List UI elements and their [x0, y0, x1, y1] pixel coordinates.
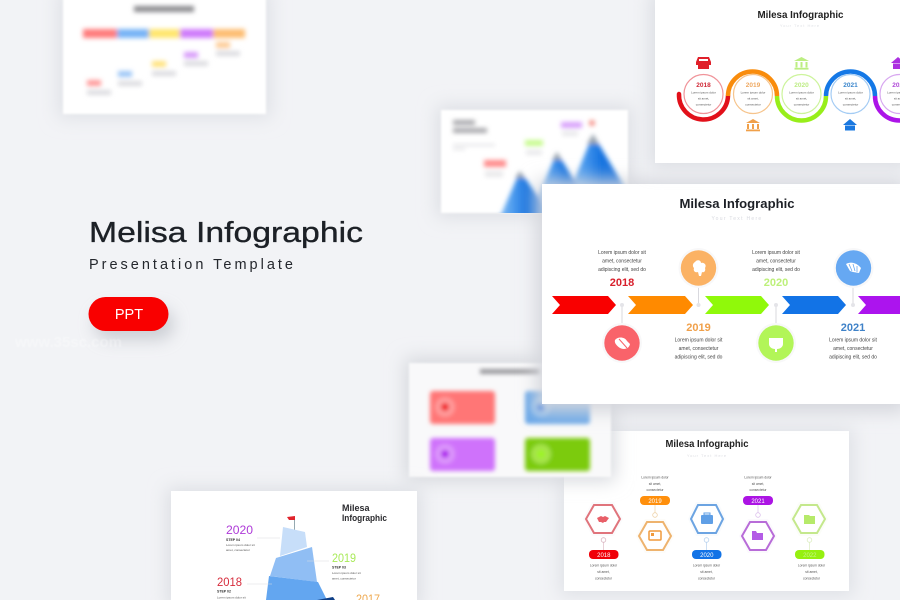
slide: semicircle timeline [650, 0, 900, 168]
label: 2019 [307, 551, 361, 580]
step: 2019: 2019 [686, 322, 711, 334]
label: 2020 [226, 523, 280, 552]
step: 2021: amet, consectetur [833, 346, 873, 352]
year ring: 2018: Lorem ipsum dolor [691, 90, 716, 94]
hexagon step: 2021: Lorem ipsum dolor [744, 476, 773, 480]
hexagon step: 2019: consectetur [646, 488, 664, 492]
icon: green bank [794, 57, 809, 70]
step: 2018: adipiscing elit, sed do [598, 267, 646, 273]
hexagon step: 2022: 2022 [803, 553, 817, 559]
arrow: orange [628, 296, 693, 314]
step: 2021: 2021 [841, 322, 865, 334]
subtitle: Presentation Template: Presentation Template [89, 257, 293, 273]
year ring: 2018 [684, 74, 723, 114]
step: 2020: 2020 [764, 277, 788, 289]
slide: layered mountain [167, 488, 421, 600]
hexagon step: 2019 [636, 476, 674, 553]
heading: main slide title: Milesa Infographic [680, 196, 794, 211]
heading: mountain slide title [342, 503, 387, 523]
label: 2018: Lorem ipsum dolor sit [217, 596, 246, 600]
step: 2021: adipiscing elit, sed do [829, 354, 877, 360]
wave: coloured arcs [679, 72, 900, 120]
heading: mountain slide title: Milesa [342, 503, 371, 513]
label: 2018: 2018 [217, 575, 242, 589]
step: 2019 [675, 248, 723, 360]
label: 2020: 2020 [226, 523, 253, 537]
step: 2018: Lorem ipsum dolor sit [598, 250, 647, 256]
step: 2020: adipiscing elit, sed do [752, 267, 800, 273]
year ring: 2019: sit amet, [747, 96, 759, 100]
step: 2020: amet, consectetur [756, 258, 796, 264]
label: 2020: STEP 04 [226, 538, 240, 542]
year ring: 2018: sit amet, [698, 96, 709, 100]
hexagon step: 2021: sit amet, [752, 482, 764, 486]
label: 2019: STEP 03 [332, 566, 346, 570]
step: 2019: adipiscing elit, sed do [675, 354, 723, 360]
hexagon step: 2018: Lorem ipsum dolor [590, 564, 618, 568]
step: 2020 [752, 250, 801, 363]
icon: blue house [843, 119, 857, 130]
step: 2018: 2018 [610, 277, 634, 289]
heading: hexagon slide title: Milesa Infographic [666, 439, 749, 450]
arrow: purple [858, 296, 900, 314]
icon: store [696, 57, 711, 69]
step: 2018: amet, consectetur [602, 258, 642, 264]
slide: blurred staircase timeline [58, 0, 271, 118]
hexagon step: 2020 [688, 502, 726, 580]
hexagon step: 2020: 2020 [700, 553, 714, 559]
button: PPT: PPT [115, 307, 143, 323]
subtitle: hexagon slide: Your Text Here [687, 453, 727, 458]
hexagon step: 2019: 2019 [648, 499, 662, 505]
year ring: 2021: 2021 [843, 82, 858, 89]
hexagon step: 2022: Lorem ipsum dolor [798, 564, 826, 568]
heading: mountain slide title: Infographic [342, 513, 387, 523]
watermark: www.35sc.com [14, 334, 122, 351]
slide: blurred colour cards [405, 358, 615, 481]
button: PPT [88, 297, 174, 340]
year ring: 2020: 2020 [794, 82, 809, 89]
heading: semicircle slide title: Milesa Infographic [758, 10, 844, 21]
year ring: 2021 [831, 74, 870, 114]
hexagon step: 2022 [790, 502, 828, 580]
step: 2021: Lorem ipsum dolor sit [829, 338, 878, 344]
year ring: 2019: consectetur [745, 102, 761, 106]
step: 2019: amet, consectetur [679, 346, 719, 352]
year ring: 2018: 2018 [696, 82, 711, 89]
hexagon step: 2019: Lorem ipsum dolor [641, 476, 670, 480]
chart: stacked mountain layers [266, 527, 335, 600]
hexagon step: 2021 [739, 476, 777, 553]
hexagon step: 2020: consectetur [698, 576, 716, 580]
icon: purple house [891, 57, 900, 69]
year ring: 2018: consectetur [696, 102, 711, 106]
arrow: red [552, 296, 616, 314]
label: 2019: Lorem ipsum dolor sit [332, 571, 361, 575]
hexagon step: 2021: 2021 [751, 499, 765, 505]
step: 2019: Lorem ipsum dolor sit [675, 338, 723, 344]
title: Melisa Infographic: Melisa Infographic [89, 217, 363, 249]
label: 2019: amet, consectetur [332, 576, 356, 580]
year ring: 2019 [734, 74, 772, 114]
subtitle: main slide: Your Text Here [712, 216, 762, 222]
hexagon step: 2018: consectetur [595, 576, 613, 580]
hexagon step: 2020: sit amet, [700, 570, 713, 574]
year ring: 2020: sit amet, [796, 96, 807, 100]
label: 2018: STEP 02 [217, 590, 231, 594]
hexagon step: 2018: sit amet, [597, 570, 610, 574]
arrow: blue [782, 296, 846, 314]
hexagon step: 2020: Lorem ipsum dolor [693, 564, 721, 568]
year ring: 2020: Lorem ipsum dolor [789, 90, 814, 94]
year ring: 2019: Lorem ipsum dolor [741, 90, 765, 94]
year ring: 2020 [782, 74, 821, 114]
year ring: 2021: sit amet, [845, 96, 856, 100]
year ring: 2020: consectetur [794, 102, 809, 106]
hexagon step: 2019: sit amet, [649, 482, 661, 486]
label: 2020: amet, consectetur [226, 548, 250, 552]
year ring: 2022 [880, 74, 900, 114]
year ring: 2021: consectetur [843, 102, 858, 106]
hexagon step: 2021: consectetur [749, 488, 767, 492]
icon: flag [287, 516, 295, 530]
step: 2021 [829, 248, 878, 360]
year ring: 2021: Lorem ipsum dolor [838, 90, 863, 94]
arrow: green [705, 296, 769, 314]
hexagon step: 2018: 2018 [597, 553, 611, 559]
slide: blurred mountains [437, 106, 632, 240]
label: 2018 [217, 575, 272, 600]
step: 2018 [598, 250, 647, 363]
step: 2020: Lorem ipsum dolor sit [752, 250, 801, 256]
hexagon step: 2022: consectetur [803, 576, 821, 580]
hexagon step: 2018 [583, 502, 623, 580]
icon: orange bank [746, 119, 760, 131]
hexagon step: 2022: sit amet, [805, 570, 818, 574]
slide: main arrow timeline [536, 180, 900, 412]
label: 2020: Lorem ipsum dolor sit [226, 543, 255, 547]
subtitle: semicircle slide: Your Text Here [780, 23, 820, 28]
slide: hexagon timeline [560, 428, 854, 596]
label: 2019: 2019 [332, 551, 356, 565]
year ring: 2019: 2019 [746, 82, 761, 89]
